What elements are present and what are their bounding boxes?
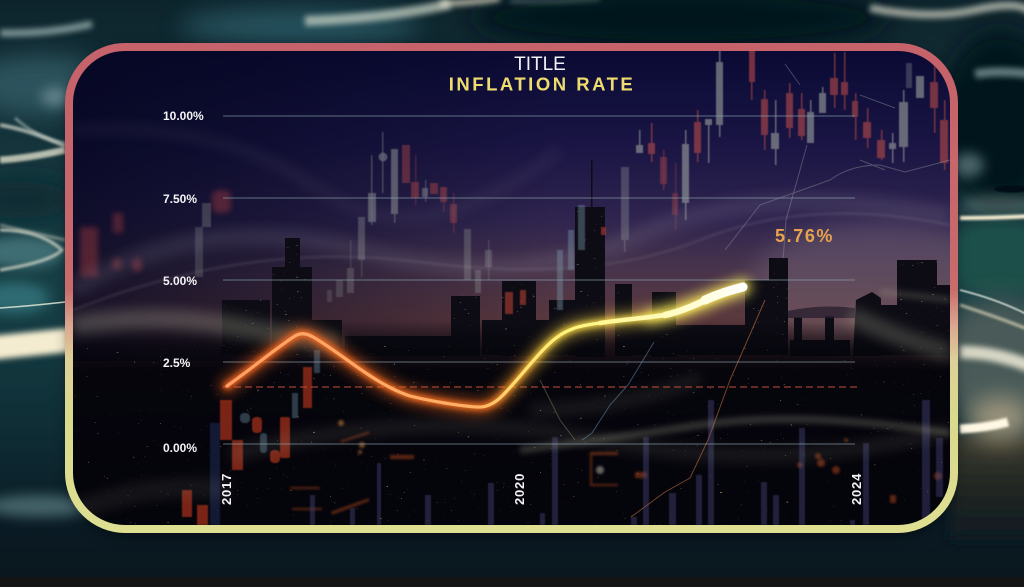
x axis labels: 2017 (219, 473, 234, 505)
distant hills (788, 307, 855, 318)
right horizon haze (750, 215, 950, 343)
city lights orange (73, 345, 950, 525)
x axis labels (219, 473, 864, 505)
panel: chart window (69, 47, 1010, 529)
pale bluish candles over tower (557, 205, 585, 310)
title: INFLATION RATE (449, 74, 635, 94)
building windows (222, 200, 950, 355)
volume bars (210, 400, 943, 525)
blurred red candles at left (80, 190, 231, 277)
orange light clusters (290, 420, 942, 515)
value callout: 5.76% (775, 226, 834, 246)
y axis labels: 5.00% (163, 274, 197, 288)
city lights (73, 345, 950, 525)
gridlines (223, 116, 855, 444)
title (449, 54, 635, 94)
fog bands: lower (73, 292, 950, 512)
title: TITLE (514, 54, 566, 75)
reference dashed line (223, 386, 860, 388)
x axis labels: 2020 (512, 473, 527, 505)
y axis labels: 7.50% (163, 192, 197, 206)
fog bands: upper (73, 192, 950, 311)
candlestick chart: upper overlay (195, 50, 948, 302)
panel border (69, 47, 954, 529)
skyline silhouettes (222, 160, 950, 357)
inflation line chart (227, 287, 743, 407)
red building accents (505, 227, 606, 314)
y axis labels: 2.5% (163, 356, 191, 370)
x axis labels: 2024 (849, 473, 864, 505)
night ground shade (73, 325, 950, 506)
y axis labels: 0.00% (163, 441, 197, 455)
thin trend lines (724, 64, 950, 258)
left sky shading (73, 51, 496, 360)
candlestick chart: lower red and blue overlay (182, 350, 320, 525)
sky backdrop (73, 51, 950, 363)
thin trend lines lower (540, 300, 765, 517)
panel shadow (69, 49, 954, 535)
y axis labels: 10.00% (163, 109, 204, 123)
y axis labels (163, 109, 204, 455)
